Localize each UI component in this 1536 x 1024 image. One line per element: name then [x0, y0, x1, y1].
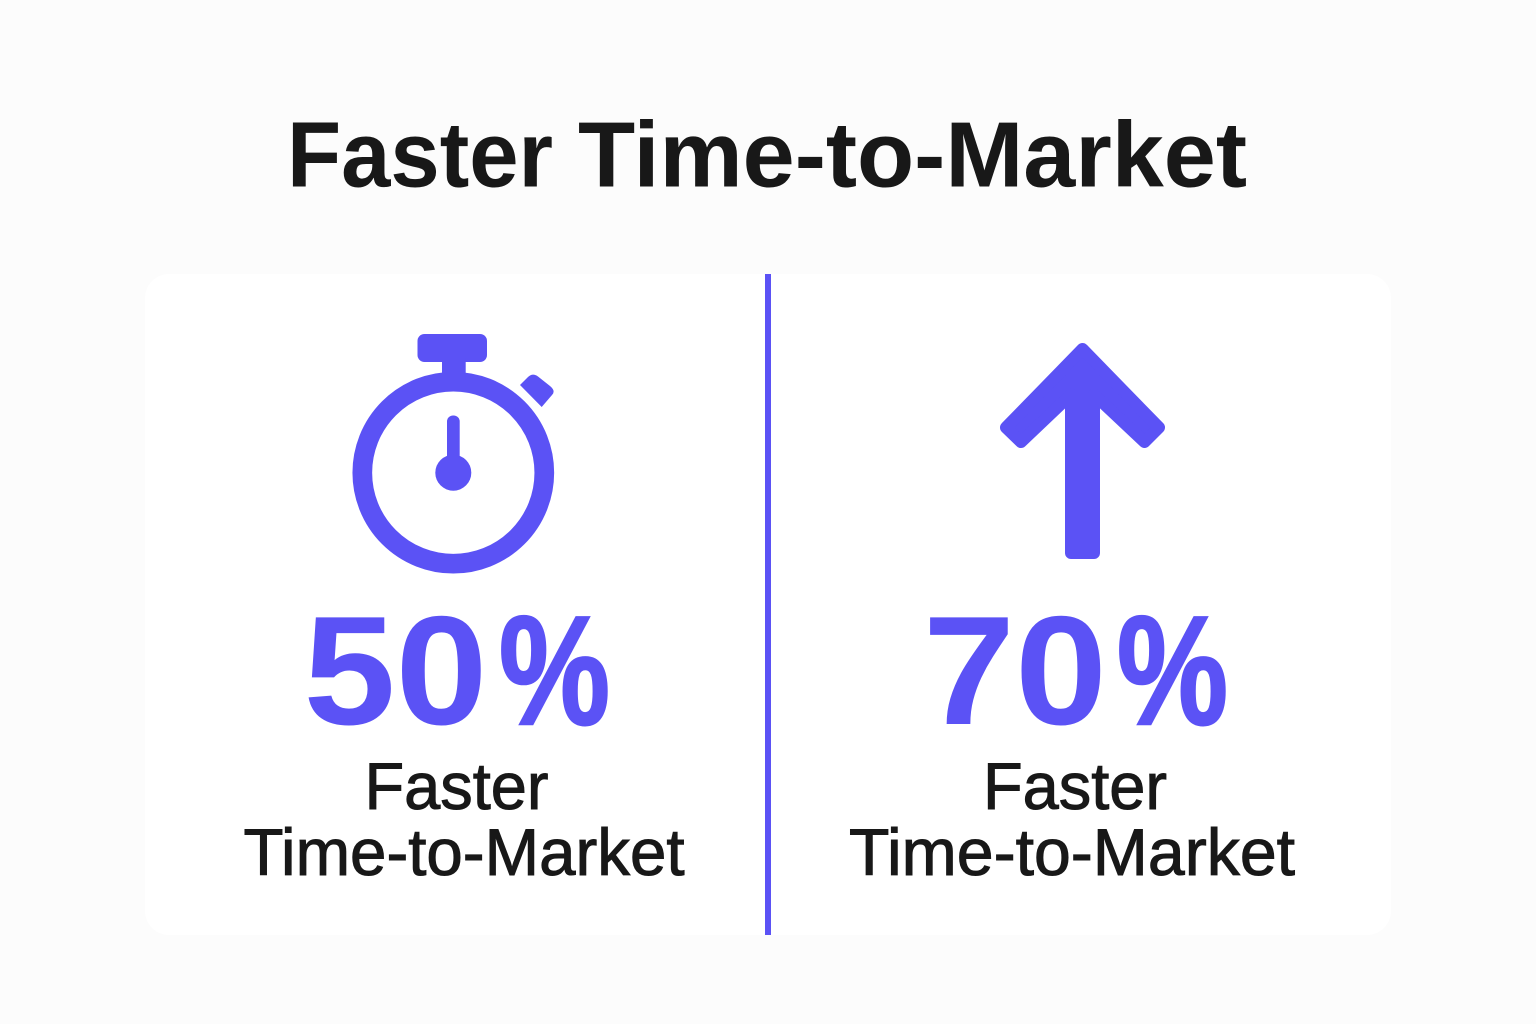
divider line	[765, 274, 771, 935]
stat: 50%	[304, 584, 610, 757]
stat: 50%: 50	[304, 584, 488, 757]
label: left caption: Time-to-Market	[244, 815, 684, 889]
label: right caption: Faster	[983, 749, 1167, 823]
title: Time-to-Market	[578, 102, 1247, 206]
stat: 70%: 70	[923, 584, 1107, 757]
title	[287, 102, 1247, 206]
label: right caption	[849, 749, 1295, 889]
label: left caption: Faster	[364, 749, 548, 823]
panel: card	[145, 274, 1391, 935]
icon: stopwatch	[362, 334, 554, 564]
label: right caption: Time-to-Market	[849, 815, 1295, 889]
label: left caption	[244, 749, 684, 889]
stat: 70%: %	[1117, 584, 1228, 757]
title: Faster	[287, 102, 553, 206]
stat: 70%	[923, 584, 1228, 757]
stat: 50%: %	[499, 584, 610, 757]
icon: up arrow	[1006, 349, 1159, 553]
